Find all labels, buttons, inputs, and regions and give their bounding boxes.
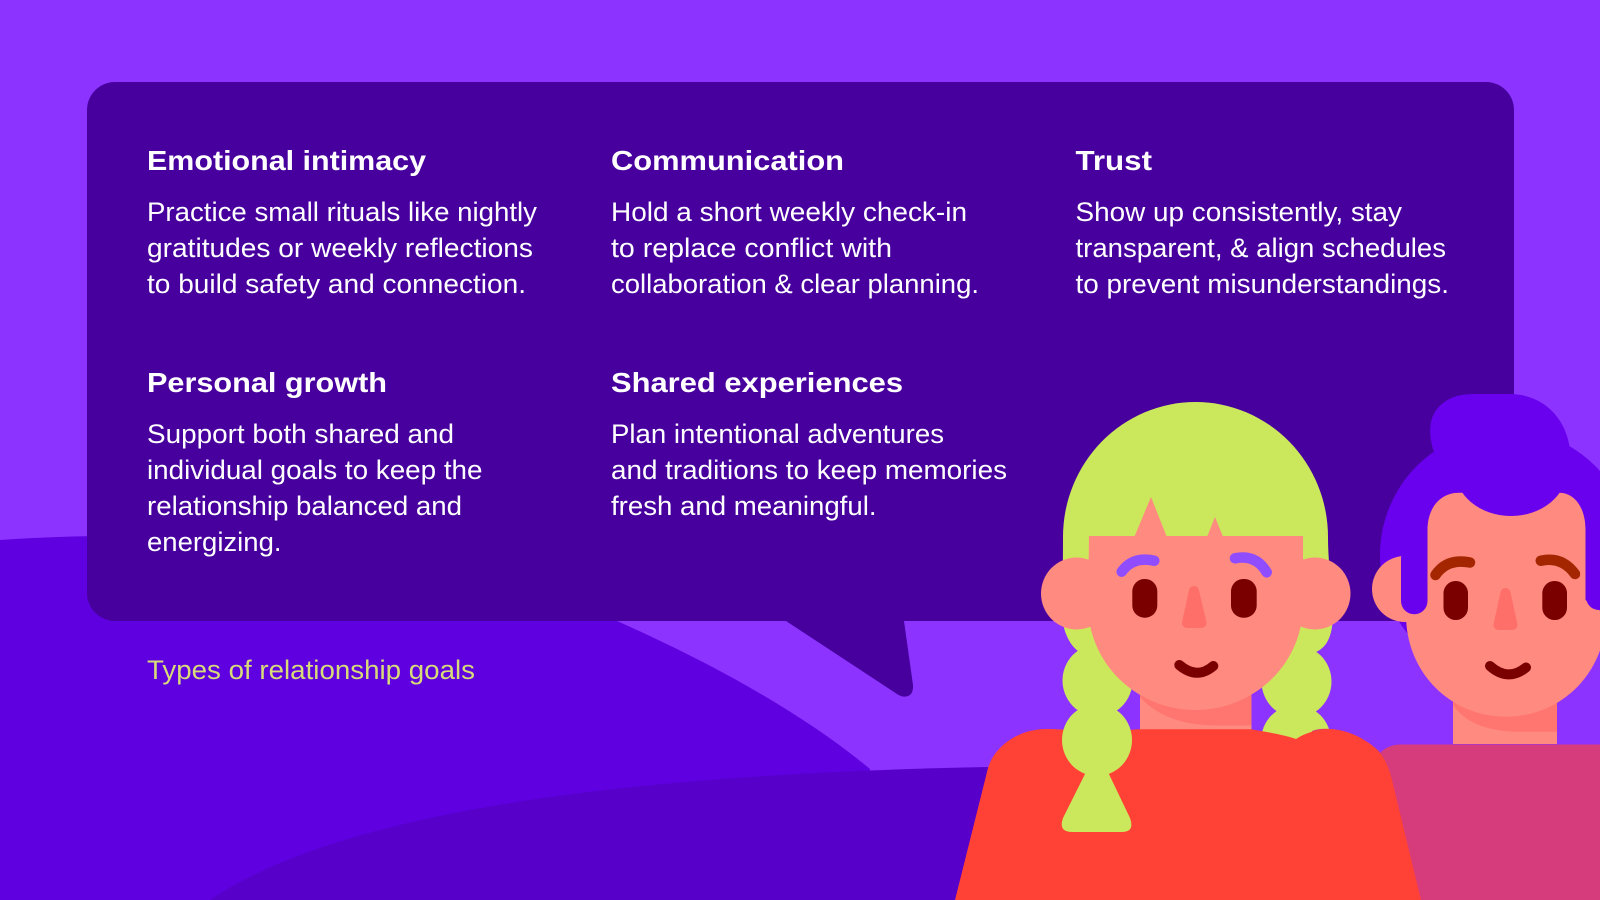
- goal: personal growth: Personal growth: [147, 367, 387, 398]
- goal: trust: [1076, 145, 1449, 299]
- mouth: [1179, 665, 1213, 673]
- goal: personal growth: relationship balanced and: [147, 491, 462, 521]
- ears: [1041, 558, 1350, 630]
- goal: personal growth: energizing.: [147, 527, 282, 557]
- goal: trust: to prevent misunderstandings.: [1076, 269, 1449, 299]
- face: [1088, 497, 1303, 710]
- goal: emotional intimacy: [147, 145, 538, 299]
- goal: emotional intimacy: to build safety and connection.: [147, 269, 526, 299]
- bun hair: [1380, 394, 1600, 681]
- neck: [1140, 690, 1252, 730]
- goal: personal growth: individual goals to keep the: [147, 455, 482, 485]
- goal: trust: Trust: [1076, 145, 1152, 176]
- fringe and locks: [1401, 424, 1600, 614]
- goal: communication: [611, 145, 979, 299]
- goal: communication: Communication: [611, 145, 844, 176]
- left braid: [1062, 644, 1132, 832]
- eyebrows: [1436, 560, 1575, 575]
- neck: [1453, 695, 1557, 744]
- shirt: red: [955, 729, 1421, 900]
- character: woman with braids: [955, 402, 1421, 900]
- goal: communication: collaboration & clear planning.: [611, 269, 979, 299]
- caption: Types of relationship goals: [147, 655, 475, 685]
- goal: trust: transparent, & align schedules: [1076, 233, 1446, 263]
- face: [1406, 493, 1600, 717]
- eyes: [1444, 581, 1567, 620]
- goal: emotional intimacy: gratitudes or weekly reflections: [147, 233, 533, 263]
- panel: speech bubble: [87, 82, 1514, 697]
- goal: trust: Show up consistently, stay: [1076, 197, 1403, 227]
- nose: [1498, 593, 1512, 625]
- eyebrows: [1122, 557, 1267, 572]
- goal: shared experiences: and traditions to keep memories: [611, 455, 1007, 485]
- eyes: [1132, 579, 1257, 618]
- right braid: [1261, 646, 1332, 777]
- shirt: pink: [1372, 744, 1600, 900]
- character: woman with bun: [1372, 394, 1600, 900]
- goal: shared experiences: Plan intentional adventures: [611, 419, 944, 449]
- ear: [1372, 556, 1438, 622]
- goal: shared experiences: fresh and meaningful.: [611, 491, 876, 521]
- background hill: mid purple: [0, 536, 870, 900]
- goal: shared experiences: Shared experiences: [611, 367, 903, 398]
- mouth: [1490, 666, 1526, 674]
- goal: personal growth: Support both shared and: [147, 419, 454, 449]
- hair back: [1063, 402, 1333, 665]
- background hill: dark purple: [210, 767, 1200, 900]
- goal: communication: to replace conflict with: [611, 233, 892, 263]
- goal: communication: Hold a short weekly check-in: [611, 197, 967, 227]
- nose: [1187, 591, 1202, 623]
- shirt edge: pink sliver: [1312, 729, 1380, 760]
- goal: shared experiences: [611, 367, 1007, 521]
- goal: emotional intimacy: Practice small rituals like nightly: [147, 197, 538, 227]
- goal: emotional intimacy: Emotional intimacy: [147, 145, 426, 176]
- goal: personal growth: [147, 367, 482, 557]
